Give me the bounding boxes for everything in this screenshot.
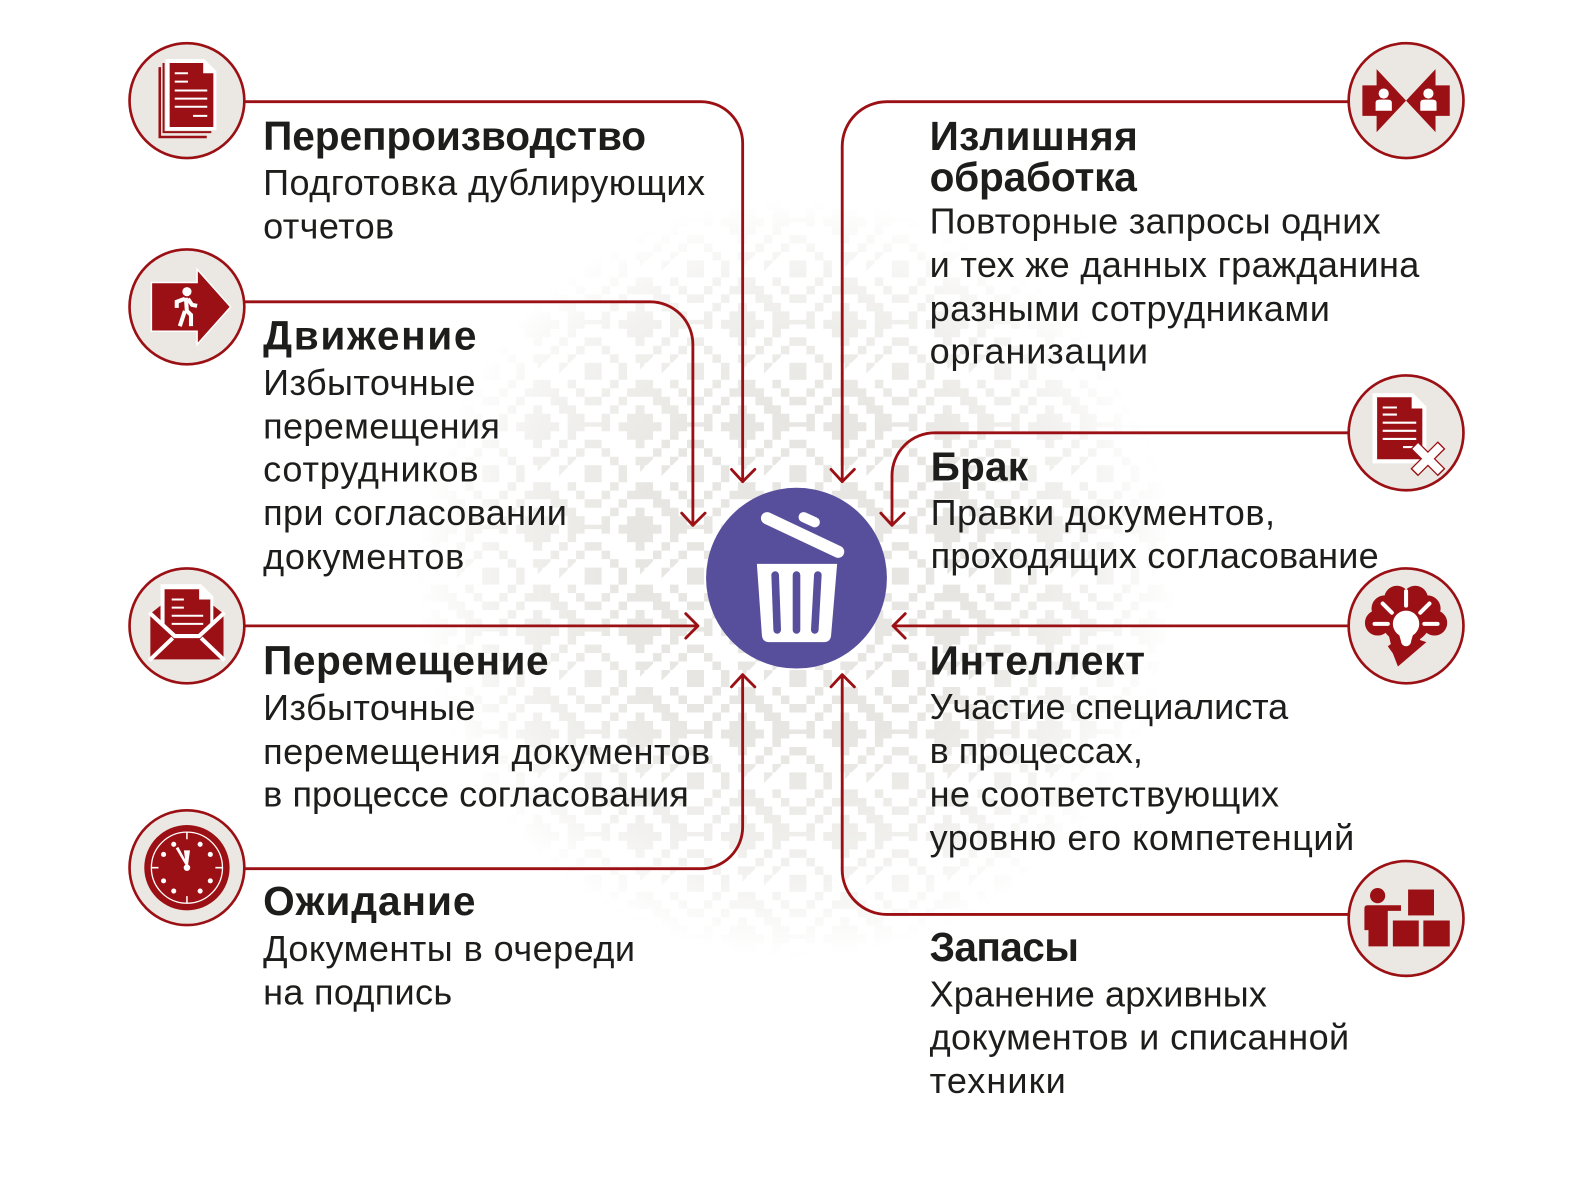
text: inventory: Хранение архивных bbox=[930, 974, 1267, 1015]
connector arrow: intellect bbox=[893, 614, 1348, 638]
panel: waiting bbox=[130, 675, 755, 1013]
heading: overproduction: Перепроизводство bbox=[263, 113, 646, 159]
text: intellect bbox=[930, 686, 1354, 858]
text: overproduction: Подготовка дублирующих bbox=[263, 162, 705, 203]
icon: envelope with document bbox=[130, 568, 244, 683]
text: overprocessing: и тех же данных гражданина bbox=[930, 244, 1420, 285]
text: overprocessing: Повторные запросы одних bbox=[930, 201, 1381, 242]
panel: transport bbox=[130, 568, 710, 815]
heading: waiting: Ожидание bbox=[263, 878, 475, 924]
text: motion: сотрудников bbox=[263, 448, 479, 489]
icon: walking person arrow bbox=[130, 249, 244, 364]
text: overprocessing: разными сотрудниками bbox=[930, 288, 1330, 329]
text: waiting: на подпись bbox=[263, 972, 452, 1013]
text: motion: Избыточные bbox=[263, 362, 475, 403]
heading: intellect: Интеллект bbox=[930, 637, 1145, 683]
text: motion: документов bbox=[263, 536, 464, 577]
heading: overprocessing bbox=[930, 113, 1138, 200]
background ornament bbox=[460, 242, 1133, 914]
icon: documents stack bbox=[130, 43, 244, 158]
text: defects: проходящих согласование bbox=[931, 535, 1379, 576]
panel: defects bbox=[881, 375, 1463, 576]
connector arrow: overprocessing bbox=[831, 102, 1348, 482]
panel: overprocessing bbox=[831, 43, 1463, 482]
panel: motion bbox=[130, 249, 705, 577]
connector arrow: overproduction bbox=[245, 102, 755, 482]
text: intellect: в процессах, bbox=[930, 730, 1143, 771]
text: overproduction: отчетов bbox=[263, 206, 394, 247]
icon: opposing arrows with people bbox=[1349, 43, 1463, 158]
text: defects: Правки документов, bbox=[931, 492, 1275, 533]
heading: overprocessing: Излишняя bbox=[930, 113, 1138, 159]
text: transport: перемещения документов bbox=[263, 731, 710, 772]
panel: inventory bbox=[831, 675, 1463, 1101]
text: motion bbox=[263, 362, 567, 577]
panel: intellect bbox=[893, 568, 1463, 858]
text: intellect: уровню его компетенций bbox=[930, 817, 1354, 858]
icon: brain with light bulb bbox=[1349, 568, 1463, 683]
text: intellect: Участие специалиста bbox=[930, 686, 1289, 727]
heading: inventory: Запасы bbox=[930, 924, 1079, 970]
text: defects bbox=[931, 492, 1379, 576]
icon: person with boxes bbox=[1349, 861, 1463, 976]
heading: defects: Брак bbox=[931, 443, 1029, 489]
icon: clock bbox=[130, 810, 244, 925]
icon: central trash bin bbox=[706, 488, 887, 669]
heading: motion: Движение bbox=[263, 312, 476, 358]
text: intellect: не соответствующих bbox=[930, 774, 1279, 815]
icon: document with cross bbox=[1349, 375, 1463, 490]
text: overprocessing bbox=[930, 201, 1420, 372]
text: waiting bbox=[263, 928, 635, 1013]
text: waiting: Документы в очереди bbox=[263, 928, 635, 969]
text: inventory: техники bbox=[930, 1060, 1066, 1101]
connector arrow: waiting bbox=[245, 675, 755, 869]
connector arrow: defects bbox=[881, 433, 1348, 525]
text: motion: перемещения bbox=[263, 406, 500, 447]
text: transport: в процессе согласования bbox=[263, 774, 689, 815]
text: motion: при согласовании bbox=[263, 492, 567, 533]
text: overproduction bbox=[263, 162, 705, 247]
connector arrow: motion bbox=[245, 302, 705, 525]
connector arrow: transport bbox=[245, 614, 698, 638]
heading: transport: Перемещение bbox=[263, 637, 549, 683]
heading: overprocessing: обработка bbox=[930, 154, 1137, 200]
text: inventory: документов и списанной bbox=[930, 1016, 1349, 1057]
text: inventory bbox=[930, 974, 1349, 1101]
text: transport bbox=[263, 687, 710, 815]
text: overprocessing: организации bbox=[930, 331, 1148, 372]
panel: overproduction bbox=[130, 43, 755, 482]
connector arrow: inventory bbox=[831, 675, 1348, 914]
text: transport: Избыточные bbox=[263, 687, 475, 728]
